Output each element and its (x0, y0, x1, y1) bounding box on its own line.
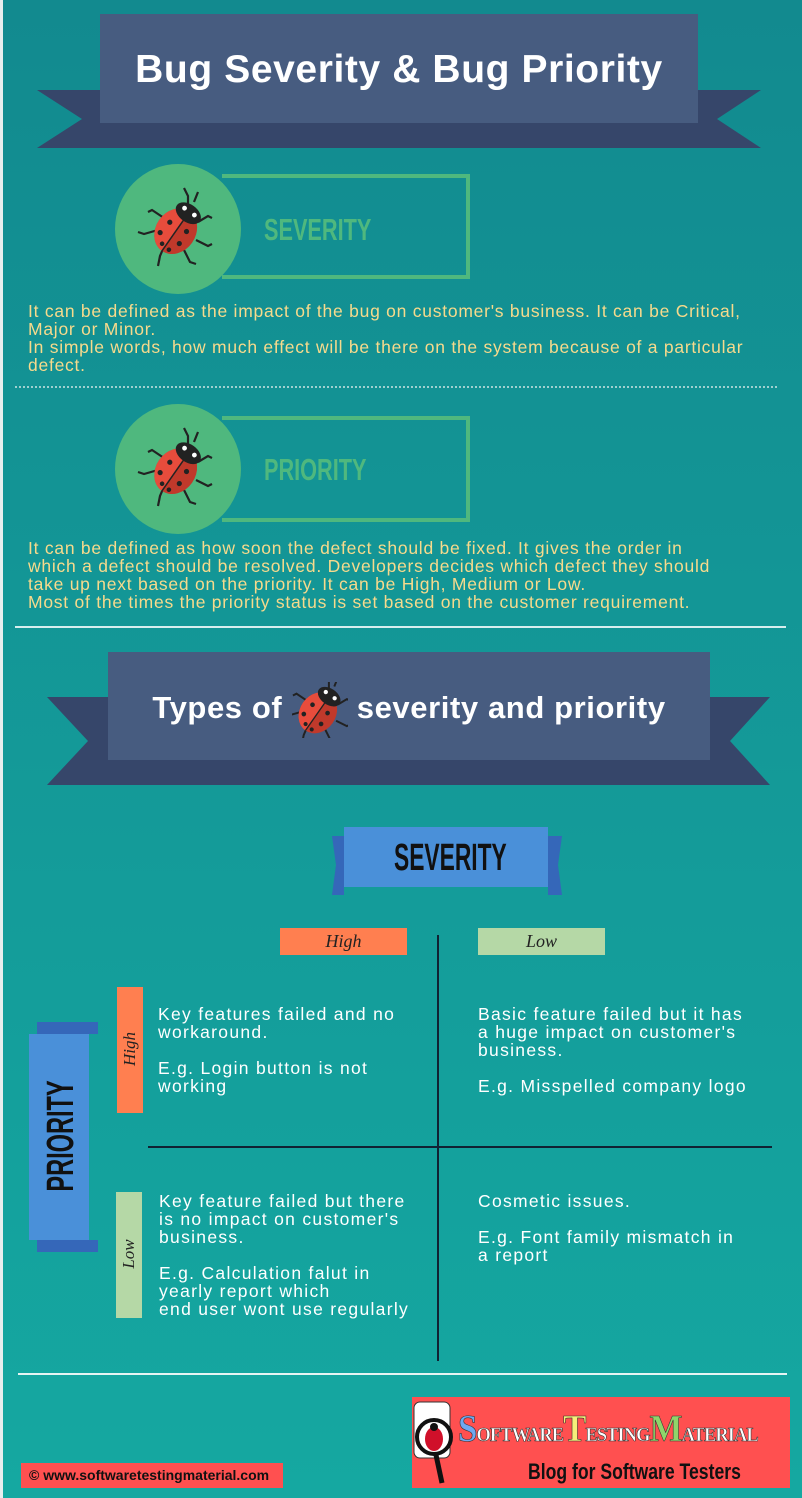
text: severity definition: Major or Minor. (28, 319, 156, 339)
text: priority definition: It can be defined as how soon the defect should be fixed. It gives the order in (28, 538, 683, 558)
quadrant: high/high: Key features failed and no (158, 1004, 395, 1024)
quadrant: high/high: E.g. Login button is not (158, 1058, 368, 1078)
ribbon: priority axis: PRIORITY (40, 1080, 82, 1192)
text: priority definition: take up next based on the priority. It can be High, Medium or Low. (28, 574, 586, 594)
heading text with ladybug: Types of severity and priority (152, 690, 666, 725)
icon: ladybug (115, 164, 241, 294)
quadrant: high/high: workaround. (158, 1022, 269, 1042)
label: severity high: High (326, 931, 362, 951)
quadrant: high priority low severity: a huge impact on customer's (478, 1022, 736, 1042)
quadrant: low priority high severity: Key feature failed but there (159, 1191, 406, 1211)
icon: magnifier ladybug (414, 1402, 453, 1484)
panel: priority heading (115, 404, 470, 534)
text: priority definition: which a defect should be resolved. Developers decides which defect they should (28, 556, 710, 576)
title: Bug Severity & Bug Priority (135, 48, 663, 91)
quadrant: low priority high severity: business. (159, 1227, 245, 1247)
ribbon: priority axis (29, 1022, 98, 1252)
label: priority low: Low (119, 1239, 138, 1269)
quadrant: high/high (158, 1004, 395, 1096)
label: priority high: High (120, 1032, 139, 1066)
quadrant: low priority high severity: E.g. Calculation falut in (159, 1263, 370, 1283)
priority label: PRIORITY (264, 452, 366, 487)
title ribbon (37, 14, 761, 148)
quadrant: high priority low severity: E.g. Misspelled company logo (478, 1076, 747, 1096)
panel: severity heading (115, 164, 470, 294)
quadrant: low/low: Cosmetic issues. (478, 1191, 631, 1211)
ribbon: severity axis: SEVERITY (394, 837, 507, 879)
text: severity definition (28, 301, 743, 375)
quadrant: high priority low severity (478, 1004, 747, 1096)
heading text with ladybug (152, 682, 666, 738)
quadrant: low priority high severity: end user wont use regularly (159, 1299, 409, 1319)
text: priority definition (28, 538, 710, 612)
text: priority definition: Most of the times the priority status is set based on the customer requirement. (28, 592, 690, 612)
label: severity high (280, 928, 407, 955)
label: priority low (116, 1192, 142, 1318)
text: severity definition: In simple words, how much effect will be there on the system because of a particular (28, 337, 743, 357)
quadrant: high priority low severity: Basic feature failed but it has (478, 1004, 743, 1024)
footer: logo: Blog for Software Testers (528, 1459, 741, 1484)
label: severity low (478, 928, 605, 955)
quadrant: low/low (478, 1191, 734, 1265)
quadrant: low/low: E.g. Font family mismatch in (478, 1227, 734, 1247)
text: severity definition: defect. (28, 355, 86, 375)
quadrant: low priority high severity (159, 1191, 409, 1319)
ribbon: types heading (47, 652, 770, 785)
quadrant: low/low: a report (478, 1245, 549, 1265)
footer: copyright: © www.softwaretestingmaterial.com (29, 1467, 269, 1483)
label: priority high (117, 987, 143, 1113)
quadrant: high priority low severity: business. (478, 1040, 564, 1060)
quadrant: low priority high severity: yearly report which (159, 1281, 331, 1301)
quadrant: low priority high severity: is no impact on customer's (159, 1209, 399, 1229)
severity label: SEVERITY (264, 212, 371, 247)
footer: logo (412, 1397, 790, 1488)
text: severity definition: It can be defined as the impact of the bug on customer's business. It can be Critical, (28, 301, 741, 321)
quadrant: high/high: working (158, 1076, 227, 1096)
label: severity low: Low (526, 931, 557, 951)
ribbon: severity axis (332, 827, 562, 895)
icon: ladybug (115, 404, 241, 534)
logo text: SOFTWARETESTINGMATERIAL (458, 1408, 758, 1450)
footer: copyright (21, 1463, 283, 1488)
